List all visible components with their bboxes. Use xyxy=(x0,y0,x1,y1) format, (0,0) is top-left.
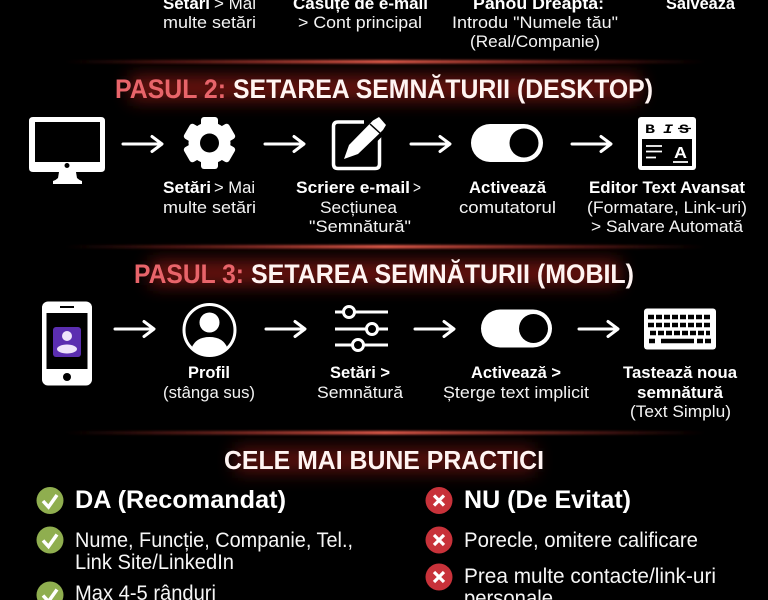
icon: desktop monitor xyxy=(29,117,105,184)
label: advanced text editor: > Salvare Automată xyxy=(591,217,744,236)
label: profile: Profil xyxy=(188,363,230,382)
item: too many contacts xyxy=(426,564,716,600)
label: signature settings: Semnătură xyxy=(317,383,404,402)
label: signature settings: Setări > xyxy=(330,363,390,382)
label: activate and delete default xyxy=(443,363,589,402)
label: compose e-mail: Scriere e-mail xyxy=(296,178,410,197)
label: activate and delete default: Activează > xyxy=(471,363,561,382)
icon: toggle switch xyxy=(481,310,552,348)
arrow xyxy=(415,322,454,336)
label: compose e-mail xyxy=(296,178,421,236)
item: contact details: Nume, Funcție, Companie, Tel., xyxy=(75,528,353,552)
label: advanced text editor: Editor Text Avansat xyxy=(589,178,745,197)
icon: edit pencil xyxy=(334,117,386,168)
label: advanced text editor: (Formatare, Link-uri) xyxy=(587,198,747,217)
label: compose e-mail: > xyxy=(413,178,421,197)
label: type new signature: (Text Simplu) xyxy=(630,402,731,421)
icon: profile avatar xyxy=(184,304,235,356)
icon: smartphone with profile app xyxy=(42,302,92,386)
label: settings: Setări xyxy=(163,178,211,197)
arrow xyxy=(266,322,305,336)
label: activate xyxy=(459,178,556,217)
arrow xyxy=(123,136,162,152)
icon: sliders xyxy=(335,306,388,350)
step 1 labels (cropped top row) xyxy=(163,0,736,51)
item: too many contacts: Prea multe contacte/link-uri xyxy=(464,564,716,588)
panel: don't list xyxy=(426,486,716,600)
label: type new signature xyxy=(623,363,738,421)
item: contact details: Link Site/LinkedIn xyxy=(75,550,234,574)
icon: rich text editor: B xyxy=(645,122,655,137)
step 1 labels (cropped top row): (Real/Companie) xyxy=(470,32,600,51)
panel: step 3 mobile flow xyxy=(42,302,738,421)
label: activate: Activează xyxy=(469,178,547,197)
label: settings xyxy=(163,178,256,217)
panel: do list xyxy=(36,486,353,600)
heading: step 3 xyxy=(134,258,634,289)
heading: step 3: SETAREA SEMNĂTURII (MOBIL) xyxy=(251,258,634,289)
label: type new signature: semnătură xyxy=(637,383,724,402)
label: compose e-mail: "Semnătură" xyxy=(309,217,411,236)
label: settings: > Mai xyxy=(214,178,255,197)
arrow xyxy=(572,136,611,152)
item: nicknames: Porecle, omitere calificare xyxy=(464,528,698,552)
icon: rich text editor xyxy=(638,117,696,170)
label: activate: comutatorul xyxy=(459,198,556,217)
step 1 labels (cropped top row): > Cont principal xyxy=(298,13,422,32)
label: type new signature: Tastează noua xyxy=(623,363,738,382)
label: activate and delete default: Șterge text implicit xyxy=(443,383,589,402)
label: signature settings xyxy=(317,363,404,402)
icon: rich text editor: A xyxy=(674,145,687,162)
icon: rich text editor: S xyxy=(679,122,689,137)
step 1 labels (cropped top row): Introdu "Numele tău" xyxy=(452,13,618,32)
heading: step 2: SETAREA SEMNĂTURII (DESKTOP) xyxy=(233,73,653,104)
item: DA heading: DA (Recomandat) xyxy=(75,486,286,514)
icon: rich text editor: I xyxy=(663,122,673,137)
label: profile xyxy=(163,363,255,402)
arrow xyxy=(115,322,154,336)
arrow xyxy=(579,322,618,336)
label: advanced text editor xyxy=(587,178,747,236)
icon: gear xyxy=(183,117,236,169)
label: profile: (stânga sus) xyxy=(163,383,255,402)
label: settings: multe setări xyxy=(163,198,256,217)
label: compose e-mail: Secțiunea xyxy=(320,198,398,217)
heading: step 2: PASUL 2: xyxy=(115,74,226,104)
icon: toggle switch xyxy=(471,124,543,162)
arrow xyxy=(265,136,304,152)
heading: step 3: PASUL 3: xyxy=(134,259,244,289)
step 1 labels (cropped top row): multe setări xyxy=(163,13,256,32)
heading: best practices: CELE MAI BUNE PRACTICI xyxy=(224,445,544,475)
panel: step 2 desktop flow xyxy=(29,117,747,236)
arrow xyxy=(411,136,450,152)
item: contact details xyxy=(36,526,353,574)
icon: keyboard xyxy=(644,308,716,350)
item: NU heading: NU (De Evitat) xyxy=(464,486,631,514)
